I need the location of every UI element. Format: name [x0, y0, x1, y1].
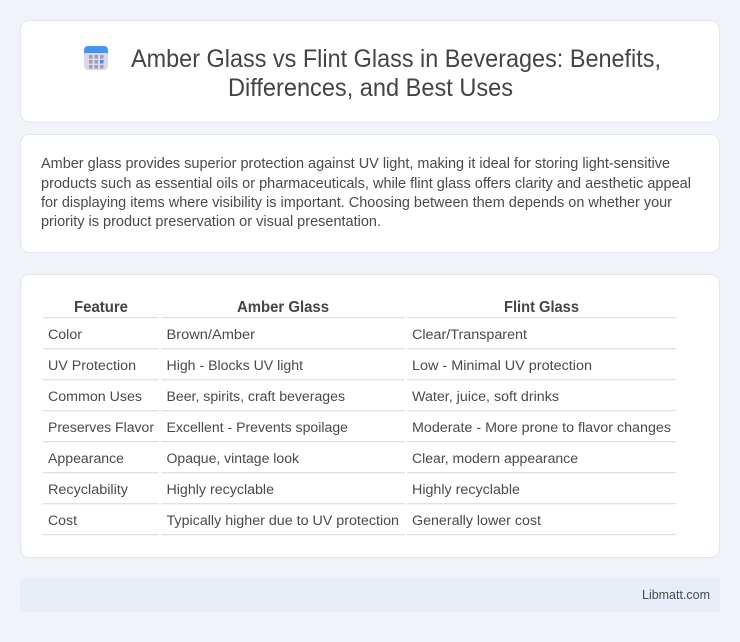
table header: Feature	[74, 299, 128, 316]
table header: Flint Glass	[504, 299, 579, 316]
row: cost: Generally lower cost	[412, 513, 541, 529]
footer bar: Libmatt.com	[642, 588, 710, 602]
row: color: Clear/Transparent	[412, 327, 527, 343]
row: appearance: Opaque, vintage look	[166, 451, 300, 467]
table header: Amber Glass	[237, 299, 329, 316]
row: preserves flavor	[48, 420, 671, 436]
row: recyclability: Highly recyclable	[166, 482, 274, 498]
table header	[74, 299, 579, 316]
panel: summary paragraph: Amber glass provides superior protection against UV light, making it ideal for storing light-sensitive	[41, 156, 670, 172]
panel: summary paragraph	[20, 134, 720, 252]
row: color: Brown/Amber	[166, 327, 255, 343]
row: preserves flavor: Moderate - More prone to flavor changes	[412, 420, 671, 436]
row: common uses: Beer, spirits, craft beverages	[166, 389, 345, 405]
row: common uses: Common Uses	[48, 389, 142, 405]
panel: title card	[20, 20, 720, 122]
panel: summary paragraph: products such as essential oils or pharmaceuticals, while flint glass offers clarity and aesthetic appeal	[41, 176, 691, 192]
row: preserves flavor: Preserves Flavor	[48, 420, 154, 436]
row: color: Color	[48, 327, 82, 343]
title: Differences, and Best Uses	[228, 74, 513, 102]
row: common uses	[48, 389, 559, 405]
row: recyclability: Highly recyclable	[412, 482, 520, 498]
row: common uses: Water, juice, soft drinks	[412, 389, 559, 405]
title: Amber Glass vs Flint Glass in Beverages: Benefits,	[131, 45, 661, 73]
row: cost: Cost	[48, 513, 77, 529]
row: appearance: Appearance	[48, 451, 124, 467]
footer bar	[20, 578, 720, 612]
row: appearance: Clear, modern appearance	[412, 451, 578, 467]
row: preserves flavor: Excellent - Prevents spoilage	[166, 420, 348, 436]
panel: summary paragraph: priority is product preservation or visual presentation.	[41, 214, 381, 230]
row: UV protection: UV Protection	[48, 358, 136, 374]
panel: comparison table	[20, 274, 720, 558]
row: recyclability: Recyclability	[48, 482, 129, 498]
row: recyclability	[48, 482, 520, 498]
row: UV protection: Low - Minimal UV protection	[412, 358, 592, 374]
row: cost	[48, 513, 541, 529]
row: appearance	[48, 451, 578, 467]
row: color	[48, 327, 527, 343]
title	[131, 45, 661, 102]
row: UV protection: High - Blocks UV light	[166, 358, 303, 374]
row: UV protection	[48, 358, 592, 374]
panel: summary paragraph: for displaying items where visibility is important. Choosing between them depends on whether your	[41, 195, 672, 211]
row: cost: Typically higher due to UV protection	[166, 513, 399, 529]
icon: calendar	[84, 46, 108, 70]
